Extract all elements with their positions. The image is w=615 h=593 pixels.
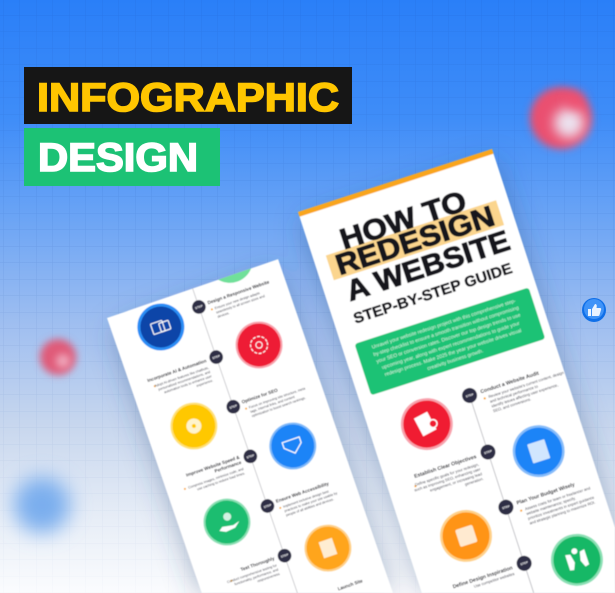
step text: budget: Plan Your Budget Wisely xyxy=(516,482,576,507)
step text: AI and automation: Incorporate AI & Automation xyxy=(147,358,207,383)
step text: optimize for SEO: optimization to boost search rankings. xyxy=(251,396,306,418)
green intro box: your SEO or conversion rates. Discover our top design trends to use xyxy=(376,312,522,365)
step text: accessibility: Ensure Web Accessibility xyxy=(275,481,330,504)
icon circle: green budget xyxy=(544,527,610,593)
step text: design inspiration: Define Design Inspiration xyxy=(452,565,513,590)
step markers left: STEP xyxy=(280,552,289,559)
step text: website speed: Improve Website Speed & xyxy=(185,454,241,478)
step text: responsive website: Ensure your new design adapts xyxy=(214,291,261,310)
step text: optimize for SEO: tags, internal links, and content xyxy=(250,395,295,414)
step text: budget: and strategic planning to maximize ROI. xyxy=(529,500,596,526)
step text: AI and automation xyxy=(147,358,215,402)
step text: website audit: Conduct a Website Audit xyxy=(480,371,540,395)
step text: budget: prioritize investments in expert guidance xyxy=(527,495,595,521)
step text: accessibility: practices to make your site usable by xyxy=(284,491,338,513)
icon circle: green hand xyxy=(197,492,257,552)
blurred blue ball bottom left xyxy=(14,477,70,533)
icon circle: orange checklist xyxy=(298,518,358,578)
step text: website speed: use caching to reduce load times. xyxy=(197,471,246,491)
step text: responsive website: devices. xyxy=(217,311,230,319)
step text: website speed xyxy=(179,454,246,495)
panel: right poster xyxy=(298,149,615,593)
step text: AI and automation: Adopt AI-driven features like chatbots, xyxy=(154,366,209,388)
icon circle: red audit xyxy=(394,391,460,457)
step markers left: STEP xyxy=(246,453,255,460)
poster title: HOW TO xyxy=(336,185,471,256)
step text: clear objectives: Define specific goals for your redesign, xyxy=(414,462,479,487)
step text: website audit: and technical performance to xyxy=(489,384,538,404)
step text: test thoroughly: Conduct comprehensive testing for xyxy=(227,563,278,584)
step text: budget xyxy=(516,477,596,527)
step markers right: STEP xyxy=(465,392,474,399)
step text: responsive website: Design a Responsive Website xyxy=(207,279,270,305)
step markers right xyxy=(460,386,534,573)
icon circle: green top xyxy=(218,268,252,284)
step markers right: STEP xyxy=(502,504,510,510)
icon circle: blue gauge xyxy=(263,416,323,476)
step text: optimize for SEO: Focus on improving site structure, meta xyxy=(248,386,306,410)
step text: launch: Launch Site xyxy=(337,578,364,591)
step text: website audit xyxy=(480,363,569,415)
step text: clear objectives: generation. xyxy=(464,476,484,487)
green intro box: Unravel your website redesign project with this comprehensive step- xyxy=(371,298,517,351)
step text: AI and automation: personalized recommendations, and xyxy=(158,370,211,392)
step markers left: STEP xyxy=(212,354,221,360)
blurred red ball left xyxy=(40,339,76,375)
title: design: DESIGN xyxy=(38,136,198,180)
step text: AI and automation: experience. xyxy=(196,378,214,388)
poster title: A WEBSITE xyxy=(342,225,514,308)
panel shadows xyxy=(112,160,615,593)
step text: website audit: identify issues affecting user experience, xyxy=(491,382,559,409)
icon circle: blue browser xyxy=(131,297,191,357)
step text: website audit: Review your website's current content, design xyxy=(488,370,564,399)
step text: responsive website: seamlessly to all screen sizes and xyxy=(216,294,265,315)
step text: budget: Assess costs for team or freelancer and xyxy=(524,485,591,511)
step markers right: STEP xyxy=(484,449,492,455)
step markers left: STEP xyxy=(229,404,238,410)
green intro box: redesign process. Make 2025 the year your website drives visual xyxy=(384,328,522,378)
timeline line left xyxy=(193,288,297,593)
title: infographic: INFOGRAPHIC xyxy=(37,76,339,120)
step text: accessibility: Implement inclusive design best xyxy=(282,489,329,509)
step markers left: STEP xyxy=(263,503,272,509)
step text: optimize for SEO: Optimize for SEO xyxy=(241,387,279,405)
green intro box: upcoming year, along with expert recommendations to guide your xyxy=(381,321,521,371)
step text: test thoroughly xyxy=(224,555,281,593)
green intro box xyxy=(355,287,545,395)
step text: accessibility: people of all abilities and devices. xyxy=(285,497,335,517)
step text: clear objectives: Establish Clear Objectives xyxy=(413,454,477,480)
orange top bar xyxy=(298,149,494,217)
green intro box: by-step checklist to ensure a smooth transition without compromising xyxy=(373,305,520,358)
step text: test thoroughly: functionality, performance, and xyxy=(234,568,279,586)
step text: test thoroughly: Test Thoroughly xyxy=(240,556,276,572)
step text: website audit: SEO, and conversions. xyxy=(492,396,532,413)
title: infographic xyxy=(24,67,352,124)
icon circle: blue objectives xyxy=(506,418,571,484)
poster title: STEP-BY-STEP GUIDE xyxy=(351,260,514,328)
icon circle: orange inspiration xyxy=(433,503,499,569)
step markers right: STEP xyxy=(520,560,528,566)
poster title xyxy=(318,176,520,330)
panel: left poster timeline xyxy=(107,231,393,593)
step text: AI and automation: automation tools to enhance user xyxy=(164,374,213,394)
step text: clear objectives: such as improving SEO, enhancing user xyxy=(413,466,482,493)
timeline line right xyxy=(469,395,534,593)
icon: thumbs up badge xyxy=(582,298,606,322)
step text: website speed: Compress images, minimize code, and xyxy=(188,467,244,490)
step markers left xyxy=(190,298,293,564)
step text: design inspiration: Use competitor websites xyxy=(473,571,515,589)
blurred red ball top right xyxy=(530,87,592,149)
step text: optimize for SEO xyxy=(241,379,309,420)
step text: responsive website xyxy=(207,279,275,320)
step text: clear objectives xyxy=(409,454,485,502)
title: design xyxy=(24,128,220,186)
step text: budget: website maintenance; specify, xyxy=(526,495,576,516)
poster title: REDESIGN xyxy=(332,200,499,282)
step markers left: STEP xyxy=(195,304,203,310)
step text: website speed: Performance xyxy=(214,460,242,474)
step text: test thoroughly: responsiveness xyxy=(257,572,281,583)
step text: clear objectives: engagement, or increasing lead xyxy=(429,471,483,493)
step text: accessibility xyxy=(275,479,340,519)
icon circle: yellow gears xyxy=(164,396,224,456)
green intro box: creativity business growth. xyxy=(427,348,484,372)
redesign highlight xyxy=(326,200,504,280)
icon circle: red target xyxy=(229,315,289,375)
